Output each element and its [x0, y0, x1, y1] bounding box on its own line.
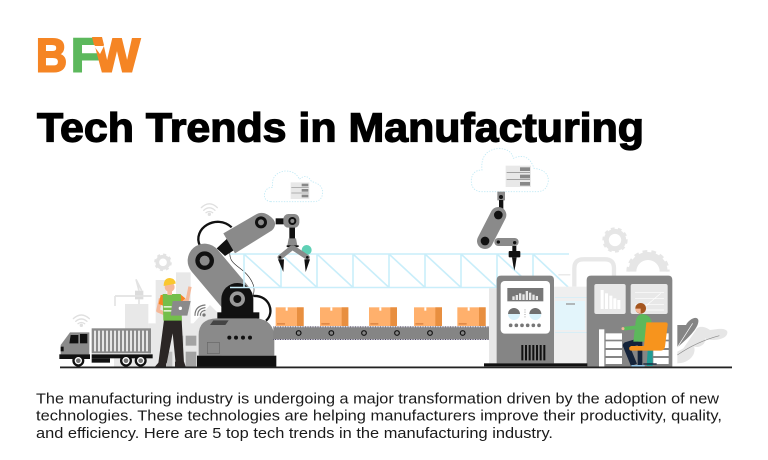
- robot arm top: [481, 192, 520, 271]
- intro paragraph: The manufacturing industry is undergoing a major transformation driven by the adoption of new: [36, 392, 720, 408]
- machine base: [484, 363, 587, 366]
- logo: BFW: W: [94, 29, 141, 82]
- robot arm: [195, 213, 276, 367]
- title: Tech Trends in Manufacturing: [37, 104, 644, 150]
- truck: [59, 328, 153, 367]
- robot gripper: [276, 214, 312, 272]
- worker: [155, 278, 191, 367]
- plant: [677, 318, 727, 363]
- icon: wifi top: [201, 204, 217, 216]
- cloud: server right: [471, 148, 548, 192]
- intro paragraph: technologies. These technologies are helping manufacturers improve their productivity, quality,: [36, 408, 722, 424]
- pipe and middle unit: [553, 259, 614, 364]
- conveyor, boxes, gripper and cloud: [264, 171, 497, 363]
- conveyor belt: [273, 288, 497, 363]
- intro paragraph: and efficiency. Here are 5 top tech trends in the manufacturing industry.: [36, 426, 553, 442]
- truss: conveyor frame: [230, 254, 569, 288]
- intro paragraph: [36, 392, 722, 442]
- background buildings and crane: [114, 272, 222, 367]
- cloud: server left: [264, 171, 323, 202]
- illustration: background city, truck, worker, robot arm: [59, 204, 276, 367]
- icon: wifi dark: [195, 305, 206, 317]
- operator on chair: [621, 303, 668, 366]
- right section: cloud, arm, machines, operator: [471, 148, 727, 367]
- icon: gear left: [155, 255, 171, 270]
- control machine left: [489, 276, 554, 363]
- control machine right: [587, 276, 672, 367]
- ground line: [60, 366, 732, 368]
- icon: wifi truck: [73, 315, 89, 327]
- boxes: [276, 307, 486, 326]
- logo: BFW: [36, 29, 141, 82]
- logo: BFW: B: [36, 29, 67, 82]
- logo: BFW: F: [71, 29, 100, 82]
- gears: [604, 229, 668, 272]
